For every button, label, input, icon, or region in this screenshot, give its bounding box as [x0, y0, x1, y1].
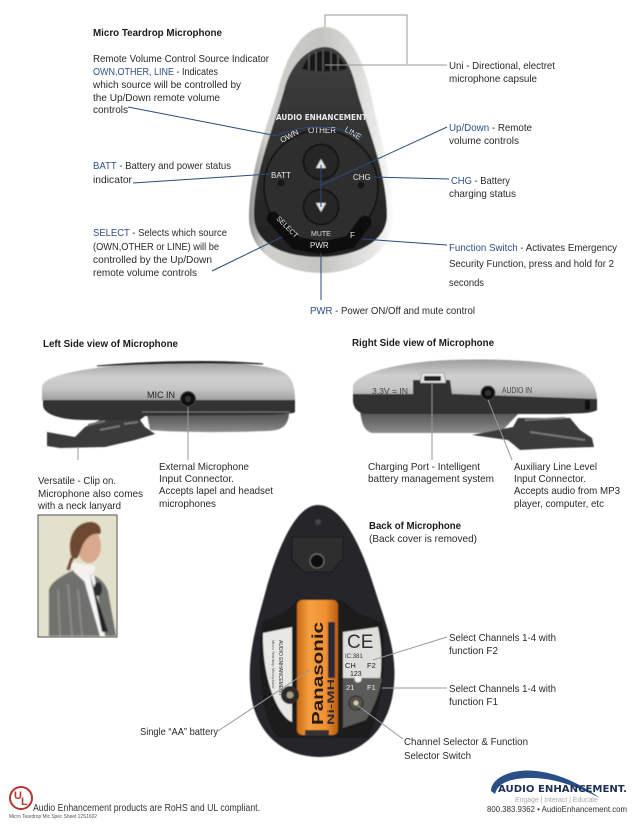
device face labels — [271, 113, 371, 250]
back device photo: IC:381 — [345, 654, 363, 660]
text: microphone capsule — [449, 61, 555, 85]
text: BATT: BATT - Battery and power status — [93, 161, 231, 172]
text: auxiliary line: Accepts audio from MP3 — [514, 486, 620, 497]
back device photo: F1 — [367, 683, 376, 692]
text: external microphone — [159, 462, 273, 510]
text: external microphone: Input Connector. — [159, 474, 234, 485]
right side device photo — [353, 360, 597, 450]
text: external microphone: Accepts lapel and headset — [159, 486, 273, 497]
text: channels F1: Select Channels 1-4 with — [449, 684, 556, 695]
text: volume control source indicator — [92, 54, 270, 116]
text: volume control source indicator: the Up/Down remote volume — [93, 93, 220, 104]
text: auxiliary line: Auxiliary Line Level — [514, 462, 597, 473]
text: SELECT: (OWN,OTHER or LINE) will be — [93, 242, 219, 253]
text: channel selector: Selector Switch — [404, 751, 471, 762]
text: clip: Versatile - Clip on. — [38, 476, 116, 487]
logo: Audio Enhancement: AUDIO ENHANCEMENT. — [498, 784, 627, 795]
label: MIC IN: MIC IN — [147, 390, 175, 400]
device face labels: BATT — [271, 171, 291, 180]
text: CHG: CHG - Battery — [451, 176, 511, 187]
text: compliance note: Audio Enhancement products are RoHS and UL compliant. — [33, 803, 260, 814]
text: spec sheet id: Micro Teardrop Mic Spec Sheet 12S1602 — [9, 814, 97, 820]
device face labels: PWR — [310, 241, 329, 250]
logo: Audio Enhancement: 800.383.9362 • AudioEnhancement.com — [487, 804, 627, 814]
text: Up/Down: volume controls — [449, 136, 519, 147]
back device photo: Panasonic — [310, 622, 327, 725]
text: AA battery: Single “AA” battery — [140, 727, 219, 738]
photo: woman wearing microphone — [38, 515, 117, 637]
device face labels: OTHER — [308, 126, 336, 135]
back device photo: 21 — [346, 683, 354, 692]
text: external microphone: External Microphone — [159, 462, 249, 473]
text: function switch: Function Switch - Activates Emergency — [449, 243, 618, 254]
back device photo: CE — [347, 632, 373, 653]
text: microphone capsule: microphone capsule — [449, 74, 537, 85]
back device photo: CH — [345, 661, 356, 670]
text: function switch: seconds — [449, 278, 484, 289]
text: function switch: Security Function, press and hold for 2 — [449, 259, 614, 270]
device face labels: SELECT — [275, 215, 299, 240]
text: function switch — [449, 243, 618, 289]
heading: Micro Teardrop Microphone: Micro Teardrop Microphone — [93, 28, 222, 39]
text: back of microphone — [369, 521, 477, 545]
text: charging port: Charging Port - Intelligent — [368, 462, 480, 473]
back device photo: Ni-MH — [326, 679, 336, 725]
device face labels: CHG — [353, 173, 371, 182]
device face labels: AUDIO ENHANCEMENT — [276, 113, 367, 122]
text: auxiliary line: Input Connector. — [514, 474, 586, 485]
text: volume control source indicator: controls — [93, 105, 128, 116]
text: clip: with a neck lanyard — [37, 501, 121, 512]
text: back of microphone: (Back cover is removed) — [369, 534, 477, 545]
text: SELECT: remote volume controls — [93, 268, 197, 279]
icon: UL mark — [10, 787, 32, 809]
text: channel selector: Channel Selector & Function — [404, 737, 528, 748]
text: Up/Down: Up/Down - Remote — [449, 123, 532, 134]
text: clip — [37, 476, 143, 512]
icon: UL mark: U — [14, 790, 22, 802]
text: SELECT: SELECT - Selects which source — [93, 228, 227, 239]
back device photo: Micro Teardrop Microphone — [271, 640, 276, 689]
device face labels: LINE — [343, 125, 363, 142]
label: AUDIO IN: AUDIO IN — [502, 386, 532, 395]
icon: UL mark: L — [21, 796, 28, 808]
back device photo: 123 — [350, 671, 362, 678]
text: BATT: indicator — [93, 175, 133, 186]
text: channels F2 — [449, 633, 556, 657]
text: BATT — [93, 161, 231, 186]
text: channels F1 — [449, 684, 556, 708]
text: PWR: PWR - Power ON/Off and mute control — [310, 306, 475, 317]
front device photo — [249, 27, 393, 273]
text: volume control source indicator: Remote Volume Control Source Indicator — [93, 54, 270, 65]
left side device photo — [42, 362, 295, 448]
text: auxiliary line — [514, 462, 620, 510]
leader lines: front device — [128, 15, 449, 300]
text: CHG — [449, 176, 516, 200]
text: auxiliary line: player, computer, etc — [514, 499, 604, 510]
text: channels F2: function F2 — [449, 646, 498, 657]
heading: right side view: Right Side view of Microphone — [352, 338, 494, 349]
text: charging port: battery management system — [368, 474, 494, 485]
device face labels: F — [350, 231, 355, 240]
text: microphone capsule: Uni - Directional, electret — [449, 61, 555, 72]
text: back of microphone: Back of Microphone — [369, 521, 461, 532]
text: channels F1: function F1 — [449, 697, 498, 708]
back device photo — [250, 505, 394, 757]
label: 3.3V IN: 3.3V = IN — [372, 386, 408, 396]
text: SELECT: controlled by the Up/Down — [93, 255, 212, 266]
text: channel selector — [404, 737, 528, 762]
text: SELECT — [93, 228, 227, 279]
device face labels: OWN — [279, 128, 300, 145]
text: Up/Down — [449, 123, 532, 147]
text: channels F2: Select Channels 1-4 with — [449, 633, 556, 644]
text: volume control source indicator: OWN,OTHER, LINE - Indicates — [93, 67, 218, 78]
logo: Audio Enhancement — [487, 770, 627, 814]
back device photo: AUDIO ENHANCEMENT — [277, 640, 283, 696]
text: external microphone: microphones — [159, 499, 216, 510]
text: charging port — [368, 462, 494, 485]
leader lines: side views — [78, 382, 512, 460]
text: clip: Microphone also comes — [38, 489, 143, 500]
back device photo: F2 — [367, 661, 376, 670]
device face labels: MUTE — [311, 231, 331, 238]
leader lines: back device — [218, 637, 447, 739]
text: volume control source indicator: which source will be controlled by — [92, 80, 242, 91]
text: CHG: charging status — [449, 189, 516, 200]
logo: Audio Enhancement: Engage | Interact | Educate — [515, 797, 598, 804]
heading: left side view: Left Side view of Microphone — [43, 339, 178, 350]
